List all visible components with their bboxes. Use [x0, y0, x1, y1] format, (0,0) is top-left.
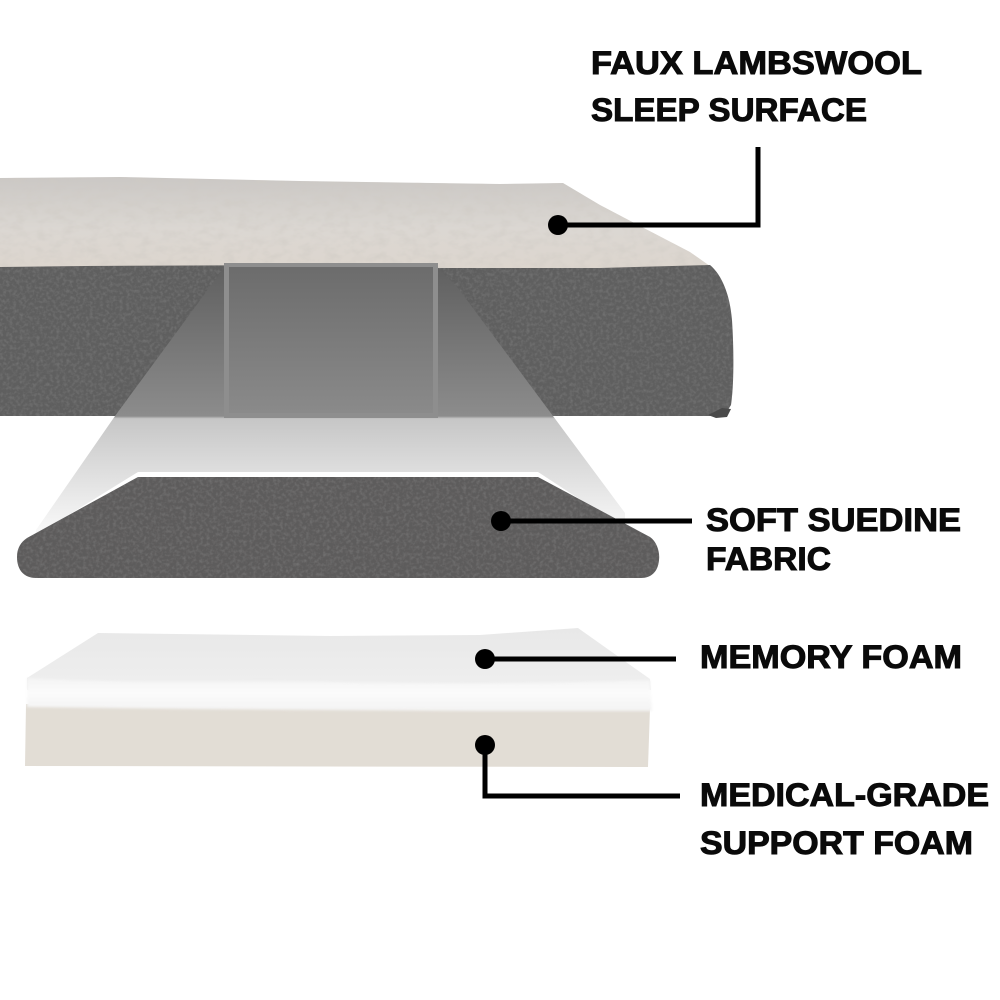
label: faux lambswool sleep surface: FAUX LAMBSWOOL — [591, 45, 922, 81]
magnifier cone — [36, 268, 625, 535]
leader line — [558, 147, 758, 225]
suedine side panel — [0, 265, 733, 416]
label: soft suedine fabric — [706, 502, 961, 577]
lambswool sleep surface — [0, 177, 710, 270]
suedine fabric swatch — [17, 477, 659, 578]
label: medical-grade support foam: MEDICAL-GRADE — [700, 777, 989, 813]
dot — [548, 215, 568, 235]
memory foam top — [27, 628, 651, 690]
bed foot — [708, 408, 731, 418]
label: faux lambswool sleep surface — [591, 45, 922, 128]
label: soft suedine fabric: SOFT SUEDINE — [706, 502, 961, 538]
memory foam front — [27, 678, 652, 711]
label: soft suedine fabric: FABRIC — [706, 541, 831, 577]
callout: suedine fabric — [491, 511, 692, 531]
label: memory foam: MEMORY FOAM — [700, 639, 962, 675]
label: medical-grade support foam: SUPPORT FOAM — [700, 825, 973, 861]
mattress bed — [0, 177, 733, 418]
support foam — [25, 704, 650, 767]
foam layers — [25, 628, 652, 767]
callout: support foam — [475, 735, 680, 796]
callout: memory foam — [475, 649, 676, 669]
label: medical-grade support foam — [700, 777, 989, 861]
label: faux lambswool sleep surface: SLEEP SURFACE — [591, 92, 867, 128]
callout: faux lambswool — [548, 147, 758, 235]
white edge above fabric — [28, 472, 650, 545]
magnified window — [224, 263, 438, 418]
